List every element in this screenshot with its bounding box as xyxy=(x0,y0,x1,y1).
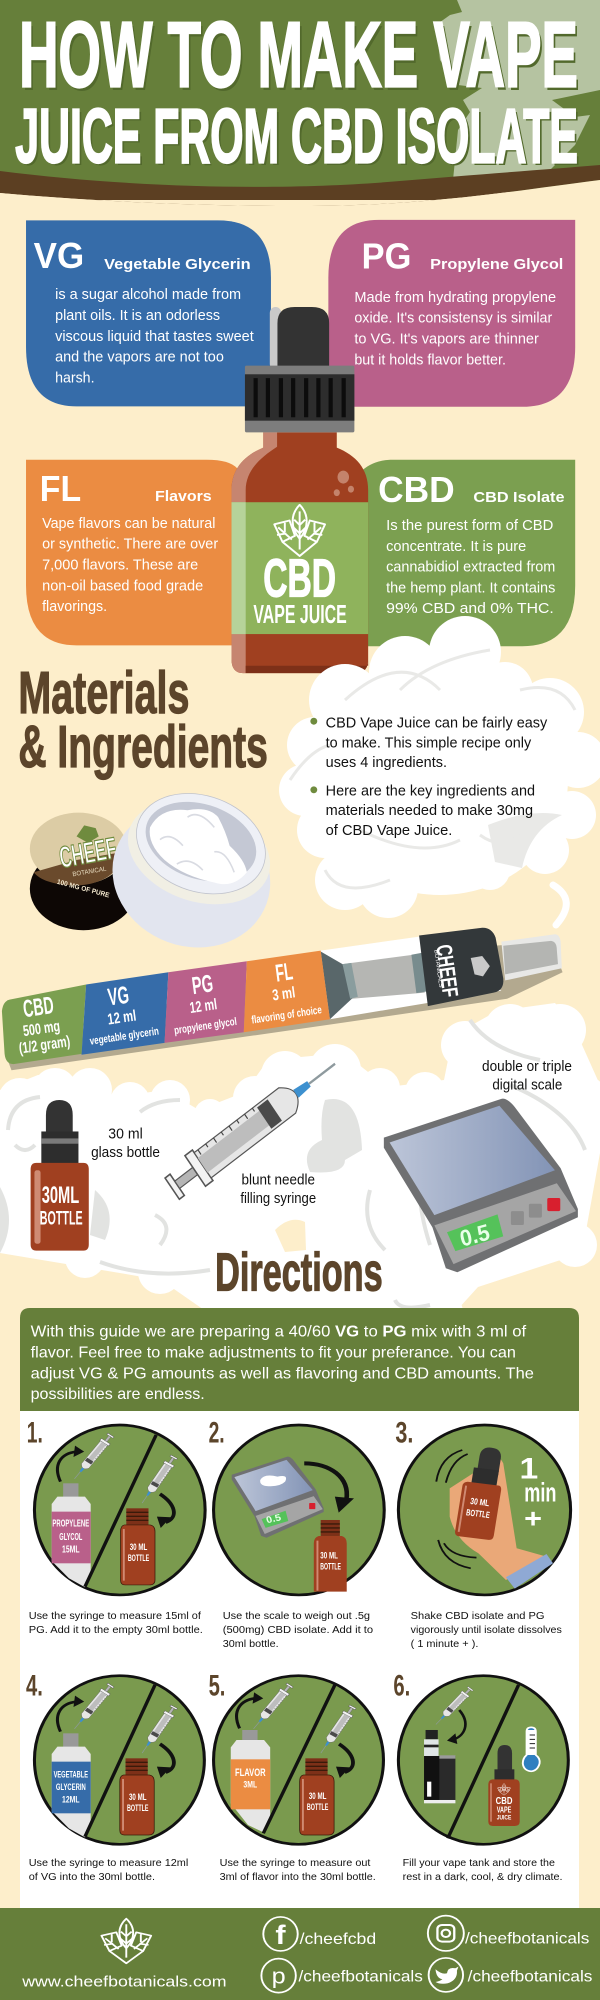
VG text: harsh. xyxy=(55,370,95,387)
bottle illustration xyxy=(232,307,368,673)
step 2 xyxy=(209,1416,384,1650)
bullet list: to make. This simple recipe only xyxy=(326,735,532,751)
bottle caption xyxy=(91,1126,160,1161)
PG text: but it holds flavor better. xyxy=(354,352,506,369)
section labels: CBD xyxy=(22,992,55,1024)
section: CBD xyxy=(2,985,86,1064)
syringe caption: filling syringe xyxy=(240,1191,316,1207)
website: www.cheefbotanicals.com xyxy=(21,1974,227,1990)
smoke cloud: lower xyxy=(0,1003,600,1331)
illustration: jar lid: 100 MG OF PURE xyxy=(56,879,111,900)
intro text: possibilities are endless. xyxy=(31,1384,205,1403)
panel: PG xyxy=(328,220,575,407)
FL text: Vape flavors can be natural xyxy=(42,515,215,532)
syringe caption: blunt needle xyxy=(241,1172,315,1189)
section labels: 500 mg xyxy=(22,1017,61,1040)
CBD panel text: concentrate. It is pure xyxy=(386,538,526,555)
FL text: flavorings. xyxy=(42,598,107,615)
step 5: 30 ML xyxy=(309,1792,326,1802)
illustration: jar lid: BOTANICAL xyxy=(72,865,107,878)
black cap xyxy=(419,928,503,1006)
intro text: adjust VG & PG amounts as well as flavoring and CBD amounts. The xyxy=(31,1363,534,1382)
step 3: vigorously until isolate dissolves xyxy=(411,1625,562,1636)
materials section xyxy=(2,660,578,1303)
step 3: min xyxy=(524,1478,556,1508)
bottle caption: glass bottle xyxy=(91,1145,160,1161)
section: FL xyxy=(244,951,330,1032)
section labels: flavoring of choice xyxy=(251,1004,323,1027)
header banner xyxy=(0,0,600,206)
facebook: f xyxy=(275,1921,286,1950)
FL text: FL xyxy=(40,469,81,509)
step 4: of VG into the 30ml bottle. xyxy=(29,1872,155,1883)
step 6: 6. xyxy=(393,1669,410,1702)
smoke shading xyxy=(307,1099,362,1172)
bar shadow xyxy=(5,942,563,1070)
pinterest: p xyxy=(272,1965,286,1989)
FL text xyxy=(40,469,218,615)
step 6 xyxy=(393,1669,568,1883)
step 3: Shake CBD isolate and PG xyxy=(411,1611,545,1622)
panel: FL xyxy=(26,460,237,645)
step 3 xyxy=(395,1416,571,1650)
step 4: 30 ML xyxy=(129,1793,147,1803)
icon: syringe xyxy=(162,1049,345,1204)
step 1: 15ML xyxy=(62,1544,80,1555)
step 5: 5. xyxy=(209,1669,225,1702)
step 4: Use the syringe to measure 12ml xyxy=(29,1858,188,1869)
PG text xyxy=(354,237,563,369)
vape tank label bar: CHEEF xyxy=(431,943,463,999)
illustration: jar lid xyxy=(30,813,137,930)
icon: 30ml bottle: BOTTLE xyxy=(40,1208,83,1230)
vape tank label bar: BOTANICALS xyxy=(432,949,443,988)
cream gap xyxy=(275,1220,306,1252)
step 5: BOTTLE xyxy=(307,1803,329,1813)
step 4: GLYCERIN xyxy=(56,1783,86,1793)
step 3: BOTTLE xyxy=(465,1508,491,1521)
CBD panel text: CBD Isolate xyxy=(473,489,565,505)
icon: footer leaf xyxy=(101,1919,151,1963)
scale caption: digital scale xyxy=(492,1077,562,1094)
footer xyxy=(0,1908,600,2000)
scale caption: double or triple xyxy=(482,1059,572,1075)
step 6: JUICE xyxy=(497,1814,511,1821)
bottle illustration: VAPE JUICE xyxy=(253,601,347,630)
syringe caption xyxy=(240,1172,316,1207)
VG text: is a sugar alcohol made from xyxy=(55,287,241,303)
icon: digital scale: 0.5 xyxy=(457,1219,492,1252)
CBD panel text: cannabidiol extracted from xyxy=(386,559,555,576)
bullet list xyxy=(310,715,548,839)
step 1: 30 ML xyxy=(130,1543,147,1553)
step 5: Use the syringe to measure out xyxy=(220,1858,370,1869)
section labels: FL xyxy=(274,959,294,988)
VG text xyxy=(34,236,254,387)
step 3: 30 ML xyxy=(469,1497,490,1509)
twitter xyxy=(429,1958,592,1992)
section: PG xyxy=(165,961,247,1043)
step 4 xyxy=(26,1669,204,1883)
icon: digital scale xyxy=(384,1099,578,1272)
intro text: With this guide we are preparing a 40/60 VG to PG mix with 3 ml of xyxy=(31,1322,526,1340)
bottle caption: 30 ml xyxy=(108,1126,143,1143)
intro text xyxy=(31,1322,534,1403)
CBD panel text: 99% CBD and 0% THC. xyxy=(386,600,554,617)
icon: 30ml bottle: 30ML xyxy=(42,1182,79,1209)
pinterest: /cheefbotanicals xyxy=(299,1967,423,1985)
section labels: 12 ml xyxy=(189,996,218,1017)
step 4: BOTTLE xyxy=(127,1804,149,1814)
FL text: non-oil based food grade xyxy=(42,578,203,595)
VG text: Vegetable Glycerin xyxy=(104,256,251,272)
header smoke xyxy=(436,0,600,180)
bullet list: CBD Vape Juice can be fairly easy xyxy=(326,715,548,731)
step 6: CBD xyxy=(496,1796,513,1807)
vape tank label bar xyxy=(2,928,563,1070)
bullet list: uses 4 ingredients. xyxy=(326,755,447,771)
title xyxy=(15,4,580,182)
FL text: or synthetic. There are over xyxy=(42,536,218,553)
step 3: + xyxy=(524,1504,542,1534)
step 1: BOTTLE xyxy=(128,1554,150,1564)
VG text: plant oils. It is an odorless xyxy=(55,307,220,324)
instagram: /cheefbotanicals xyxy=(465,1928,589,1947)
section labels: 12 ml xyxy=(107,1007,137,1029)
step 4: 4. xyxy=(26,1669,43,1702)
step 3: 3. xyxy=(395,1416,413,1449)
bullet list: Here are the key ingredients and xyxy=(326,783,535,800)
step 6: Fill your vape tank and store the xyxy=(403,1858,555,1869)
section labels: propylene glycol xyxy=(173,1016,238,1037)
step 2: 2. xyxy=(209,1416,225,1449)
CBD panel text: Is the purest form of CBD xyxy=(386,517,553,534)
header curve xyxy=(0,165,600,206)
step 4: VEGETABLE xyxy=(54,1770,88,1780)
twitter: /cheefbotanicals xyxy=(468,1967,592,1985)
ingredient panels xyxy=(26,220,575,646)
step 2: (500mg) CBD isolate. Add it to xyxy=(223,1625,373,1636)
directions panel xyxy=(20,1308,579,1908)
facebook: /cheefcbd xyxy=(300,1929,376,1948)
section labels xyxy=(18,959,323,1058)
illustration: jar lid: CHEEF xyxy=(57,832,119,875)
heading: materials: & Ingredients xyxy=(18,714,268,780)
PG text: Made from hydrating propylene xyxy=(354,289,556,306)
step 3: ( 1 minute + ). xyxy=(411,1639,478,1650)
step 2: Use the scale to weigh out .5g xyxy=(223,1611,370,1622)
steps row 2 xyxy=(26,1669,568,1883)
bullet list: of CBD Vape Juice. xyxy=(326,823,452,839)
heading: materials xyxy=(18,660,268,780)
CBD panel text: CBD xyxy=(378,470,455,510)
PG text: Propylene Glycol xyxy=(430,256,563,272)
bullet list: materials needed to make 30mg xyxy=(326,803,533,819)
white cartridge xyxy=(321,936,501,1019)
section labels: 3 ml xyxy=(271,984,296,1005)
FL text: 7,000 flavors. These are xyxy=(42,557,198,574)
intro text: flavor. Feel free to make adjustments to fit your preferance. You can xyxy=(31,1342,516,1361)
section labels: (1/2 gram) xyxy=(18,1033,71,1058)
step 1: PG. Add it to the empty 30ml bottle. xyxy=(29,1625,203,1636)
step 6: rest in a dark, cool, & dry climate. xyxy=(403,1872,563,1883)
panel: CBD xyxy=(360,460,575,646)
step 5: 3ml of flavor into the 30ml bottle. xyxy=(220,1872,376,1883)
step 6: VAPE xyxy=(497,1805,511,1815)
section labels: vegetable glycerin xyxy=(89,1025,160,1048)
PG text: oxide. It's consistensy is similar xyxy=(354,310,552,327)
step 5 xyxy=(209,1669,383,1883)
icon: 30ml bottle xyxy=(31,1100,89,1251)
PG text: to VG. It's vapors are thinner xyxy=(354,331,539,348)
icon: leaf xyxy=(274,505,325,556)
smoke cloud: upper xyxy=(279,616,600,925)
VG text: viscous liquid that tastes sweet xyxy=(55,328,254,345)
step 5: 3ML xyxy=(243,1780,257,1790)
section labels: VG xyxy=(106,982,131,1012)
FL text: Flavors xyxy=(155,488,212,504)
panel: VG xyxy=(26,220,271,406)
steps row 1 xyxy=(27,1416,571,1650)
scale caption xyxy=(482,1059,572,1094)
PG text: PG xyxy=(362,237,411,277)
step 1: 1. xyxy=(27,1416,43,1449)
step 2: 30ml bottle. xyxy=(223,1639,279,1650)
section labels: PG xyxy=(190,971,215,1000)
step 3: 1 xyxy=(520,1451,538,1485)
step 1: PROPYLENE xyxy=(52,1518,89,1529)
facebook xyxy=(263,1917,376,1951)
step 2: BOTTLE xyxy=(320,1562,341,1572)
heading: directions: Directions xyxy=(215,1243,383,1303)
step 1 xyxy=(27,1416,205,1636)
pinterest xyxy=(261,1959,423,1993)
step 1: GLYCOL xyxy=(59,1532,83,1543)
step 1: Use the syringe to measure 15ml of xyxy=(29,1611,202,1622)
step 2: 30 ML xyxy=(320,1551,338,1561)
section: VG xyxy=(82,972,168,1055)
bottle label text: CBD xyxy=(263,548,336,608)
icon: cap leaf xyxy=(471,956,490,976)
panel text xyxy=(34,236,563,615)
step 5: FLAVOR xyxy=(235,1768,266,1779)
heading: materials: Materials xyxy=(18,660,189,726)
step 2: 0.5 xyxy=(265,1513,283,1526)
CBD panel text: the hemp plant. It contains xyxy=(386,580,555,597)
VG text: and the vapors are not too xyxy=(55,349,224,366)
step 4: 12ML xyxy=(62,1795,80,1805)
illustration: open jar xyxy=(98,778,285,965)
instagram xyxy=(428,1916,589,1951)
VG text: VG xyxy=(34,236,84,277)
CBD panel text xyxy=(378,470,565,617)
